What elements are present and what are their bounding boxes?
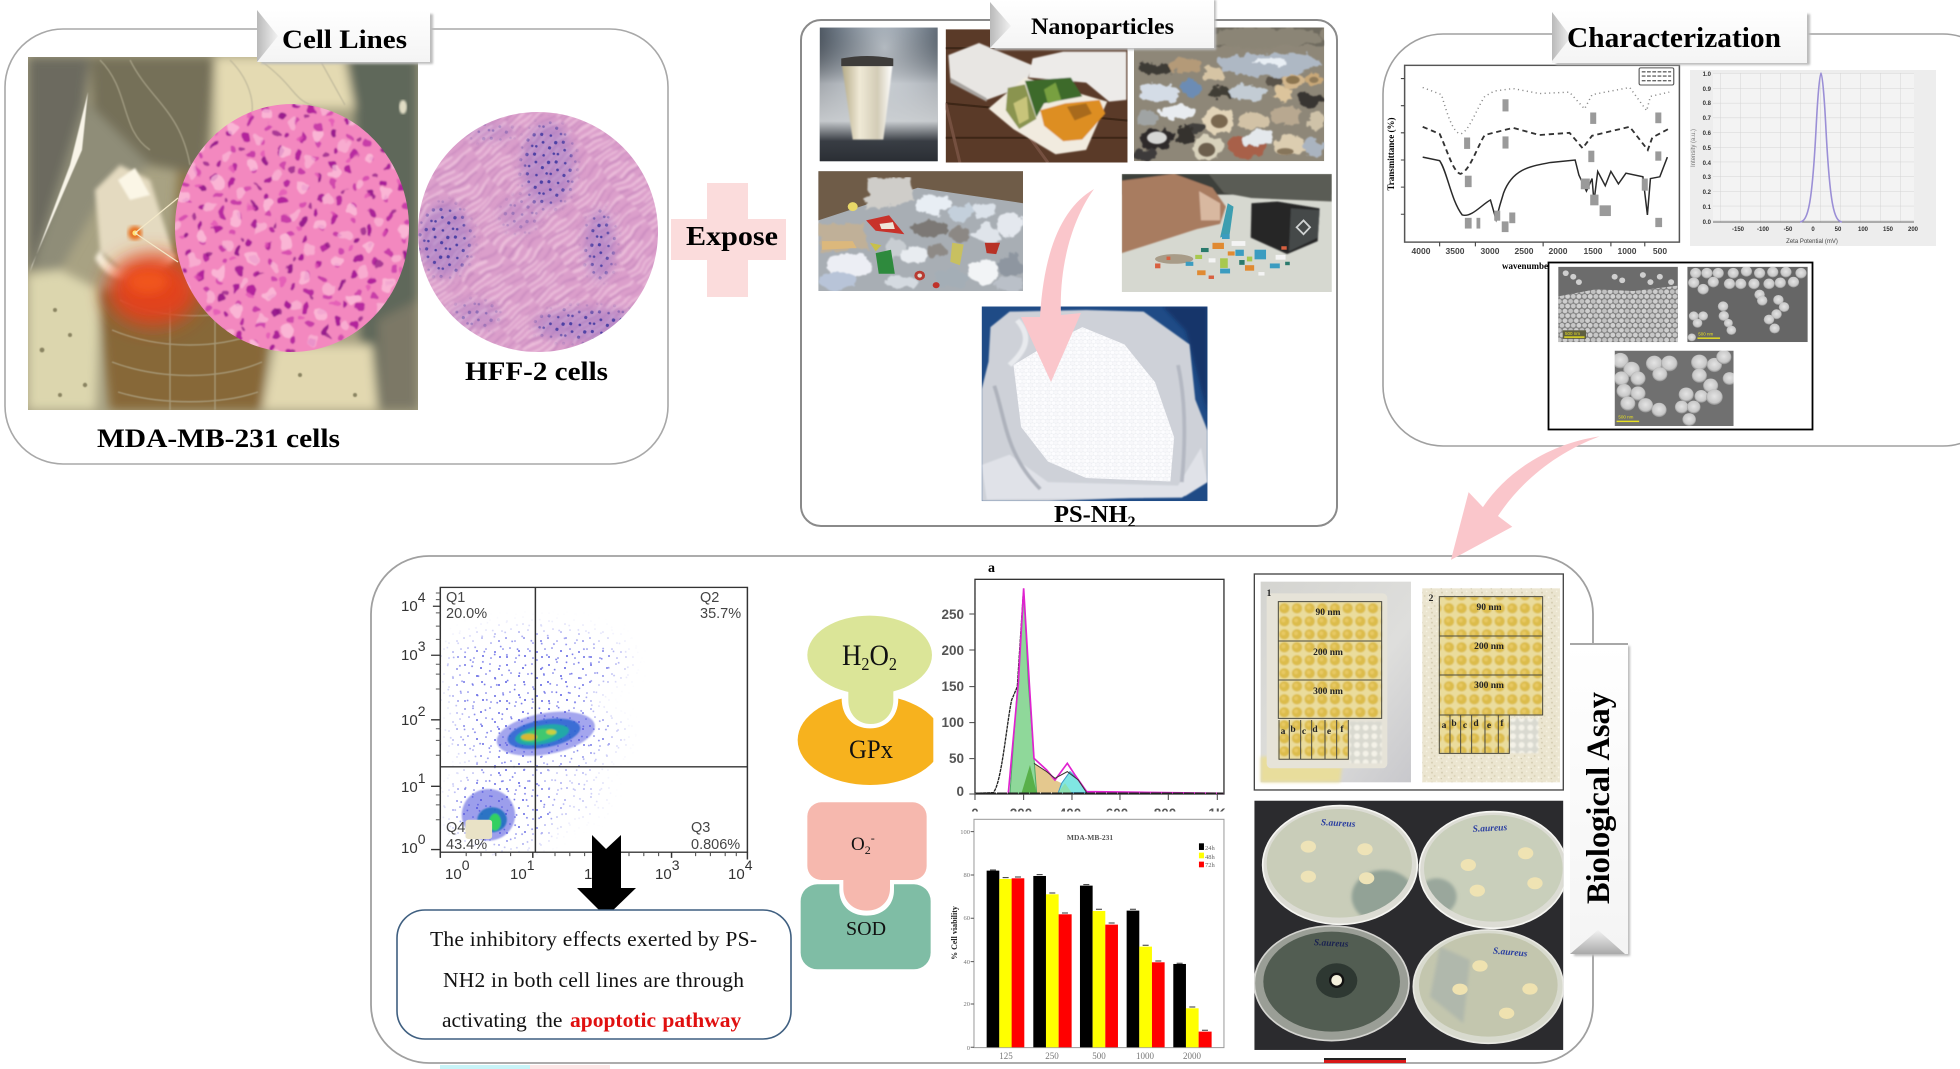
photo: trash bin xyxy=(818,171,1023,292)
image: MTT well plates: e xyxy=(1487,721,1491,731)
image: MDA-MB-231 histology circle xyxy=(170,100,415,358)
chart: flow cytometry scatter: 2 xyxy=(601,857,609,873)
image: SEM 300 nm xyxy=(1612,350,1736,426)
chart: FTIR spectra: 2000 xyxy=(1549,246,1568,256)
image: S. aureus agar plates xyxy=(1254,801,1567,1050)
chart: zeta potential: 1.0 xyxy=(1703,72,1712,78)
image: MTT well plates: 200 nm xyxy=(1474,642,1504,652)
chart: zeta potential: -100 xyxy=(1757,227,1770,233)
chart: zeta potential: 150 xyxy=(1883,227,1894,233)
chart: zeta potential: 0.2 xyxy=(1703,190,1712,196)
chart: flow cytometry scatter: 10 xyxy=(401,712,418,729)
image: SEM 90 nm: 500 nm xyxy=(1565,331,1580,336)
image: MTT well plates: f xyxy=(1500,719,1504,729)
chart: flow cytometry scatter: 1 xyxy=(418,770,426,786)
chart: cell viability bars: 0 xyxy=(967,1045,970,1052)
chart: cell viability bars: 24h xyxy=(1205,845,1216,852)
diagram: H2O2 and GPx: O xyxy=(870,639,889,672)
chart: cell cycle histogram: 600 xyxy=(1106,806,1128,821)
chart: FTIR spectra: 4000 xyxy=(1412,246,1431,256)
chart: FTIR spectra: wavenumber (cm-1) xyxy=(1502,261,1579,271)
chart: flow cytometry scatter: 10 xyxy=(655,866,672,883)
chart: zeta potential: 0.9 xyxy=(1703,87,1712,93)
chart: zeta potential: 50 xyxy=(1835,227,1842,233)
chart: flow cytometry scatter: 0 xyxy=(462,857,470,873)
petri dish 2 xyxy=(1417,812,1567,928)
chart: cell cycle histogram: 400 xyxy=(1059,806,1081,821)
petri dish 3 with inhibition zone xyxy=(1254,926,1409,1041)
box: SEM micrographs xyxy=(1548,262,1812,430)
image: MTT well plates: e xyxy=(1327,727,1331,737)
chart: flow cytometry scatter: 0.806% xyxy=(691,837,740,853)
chart: cell viability bars xyxy=(950,819,1224,1061)
chart: cell viability bars: 500 xyxy=(1092,1051,1106,1061)
image: MTT well plates: 1 xyxy=(1267,589,1272,599)
image: MTT well plates: a xyxy=(1281,727,1286,737)
chart: cell viability bars: 2000 xyxy=(1183,1051,1202,1061)
diagram: H2O2 and GPx: GPx xyxy=(849,735,893,764)
heading tag: characterization xyxy=(1552,10,1810,65)
chart: cell cycle histogram: 150 xyxy=(941,679,964,694)
chart: flow cytometry scatter: 3 xyxy=(418,638,426,654)
chart: zeta potential: -50 xyxy=(1784,227,1793,233)
chart: zeta potential xyxy=(1690,70,1936,246)
image: MTT well plates: 90 nm xyxy=(1476,603,1502,613)
image: MTT well plates xyxy=(1254,574,1563,790)
chart: FTIR spectra: 1000 xyxy=(1618,246,1637,256)
callout: apoptotic pathway conclusion: apoptotic pathway xyxy=(570,1008,741,1032)
chart: zeta potential: 200 xyxy=(1908,227,1919,233)
image: S. aureus agar plates: S.aureus xyxy=(1472,823,1508,835)
chart: cell cycle histogram: 0 xyxy=(971,806,979,821)
heading tag: nanoparticles xyxy=(990,0,1216,50)
image: SEM 200 nm: 500 nm xyxy=(1698,332,1714,337)
chart: cell viability bars: MDA-MB-231 xyxy=(1067,833,1113,842)
image: MTT well plates: 300 nm xyxy=(1313,687,1343,697)
chart: flow cytometry scatter: Q3 xyxy=(691,820,710,836)
chart: flow cytometry scatter: 43.4% xyxy=(446,837,487,853)
image: MTT well plates: 90 nm xyxy=(1315,608,1341,618)
chart: zeta potential: -150 xyxy=(1732,227,1745,233)
chart: FTIR spectra: 3500 xyxy=(1446,246,1465,256)
image: MTT well plates: c xyxy=(1302,727,1306,737)
chart: flow cytometry scatter: 10 xyxy=(728,866,745,883)
chart: cell viability bars: 125 xyxy=(999,1051,1013,1061)
chart: flow cytometry scatter: 2 xyxy=(418,703,426,719)
chart: FTIR spectra xyxy=(1386,65,1679,271)
image: MTT well plates: a xyxy=(1442,721,1447,731)
chart: cell viability bars: 80 xyxy=(964,872,970,879)
chart: cell viability bars: 40 xyxy=(964,959,970,966)
chart: zeta potential: 0 xyxy=(1811,227,1815,233)
heading tag: cell lines xyxy=(257,10,433,64)
scale bar remnant xyxy=(1324,1058,1406,1063)
chart: flow cytometry scatter: 3 xyxy=(672,857,680,873)
label: PS-NH2: PS-NH xyxy=(1054,501,1128,528)
chart: cell viability bars: 100 xyxy=(960,829,970,836)
heading tag: biological assay: Biological Asay xyxy=(1581,692,1617,904)
chart: FTIR spectra: 1500 xyxy=(1584,246,1603,256)
image: S. aureus agar plates: S.aureus xyxy=(1493,947,1528,960)
arrow: characterization to biological assay xyxy=(1451,436,1600,560)
decorative colour remnants under panel xyxy=(440,1065,610,1069)
chart: flow cytometry scatter: Q4 xyxy=(446,820,465,836)
label: MDA-MB-231 cells: MDA-MB-231 cells xyxy=(97,424,340,453)
image: MTT well plates: b xyxy=(1290,725,1296,735)
chart: zeta potential: Intensity (a.u.) xyxy=(1691,129,1697,167)
image: MTT well plates: d xyxy=(1312,725,1318,735)
chart: cell viability bars: % Cell viability xyxy=(950,906,959,960)
label: PS-NH2 xyxy=(1054,506,1135,526)
diagram: O2- and SOD: SOD xyxy=(846,918,886,940)
chart: cell cycle histogram: 100 xyxy=(941,715,964,730)
chart: cell viability bars: 72h xyxy=(1205,862,1216,869)
callout: apoptotic pathway conclusion: The inhibitory effects exerted by PS- xyxy=(430,927,757,951)
image: MTT well plates: b xyxy=(1451,719,1457,729)
heading tag: nanoparticles: Nanoparticles xyxy=(1031,14,1174,39)
panel: characterization xyxy=(1383,10,1960,446)
chart: cell cycle histogram: 1K xyxy=(1208,806,1226,821)
chart: flow cytometry scatter: 10 xyxy=(401,598,418,615)
chart: flow cytometry scatter: Q1 xyxy=(446,590,465,606)
chart: flow cytometry scatter: 10 xyxy=(401,840,418,857)
heading tag: cell lines: Cell Lines xyxy=(282,25,407,54)
chart: cell cycle histogram: 0 xyxy=(956,784,964,799)
image: SEM 200 nm xyxy=(1687,266,1808,342)
chart: flow cytometry scatter: 4 xyxy=(418,589,426,605)
diagram: H2O2 and GPx: 2 xyxy=(889,654,897,674)
chart: flow cytometry scatter: 20.0% xyxy=(446,606,487,622)
image: S. aureus agar plates: S.aureus xyxy=(1321,818,1356,830)
chart: cell cycle histogram: 50 xyxy=(949,751,964,766)
image: S. aureus agar plates: S.aureus xyxy=(1314,938,1349,950)
chart: FTIR spectra: 3000 xyxy=(1481,246,1500,256)
chart: zeta potential: 0.7 xyxy=(1703,116,1712,122)
plate 1 xyxy=(1261,582,1411,782)
image: MTT well plates: 200 nm xyxy=(1313,648,1343,658)
chart: flow cytometry scatter: 0 xyxy=(418,831,426,847)
callout: apoptotic pathway conclusion: activating the xyxy=(442,1008,562,1032)
image: MTT well plates: c xyxy=(1463,721,1467,731)
photo: white cup xyxy=(820,28,938,161)
chart: zeta potential: 0.8 xyxy=(1703,101,1712,107)
chart: cell cycle histogram: a xyxy=(988,561,995,576)
label: HFF-2 cells: HFF-2 cells xyxy=(465,357,608,386)
chart: zeta potential: 100 xyxy=(1858,227,1869,233)
chart: cell cycle histogram: 250 xyxy=(941,607,964,622)
chart: cell viability bars: 20 xyxy=(964,1001,970,1008)
chart: flow cytometry scatter: 10 xyxy=(445,866,462,883)
panel: biological assay xyxy=(371,556,1630,1069)
chart: flow cytometry scatter: 10 xyxy=(401,647,418,664)
chart: flow cytometry scatter: 1 xyxy=(527,857,535,873)
image: HFF-2 histology circle xyxy=(412,106,664,358)
diagram: O2- and SOD xyxy=(801,802,931,969)
chart: cell viability bars: 1000 xyxy=(1136,1051,1154,1061)
chart: cell cycle histogram: 200 xyxy=(941,643,964,658)
chart: flow cytometry scatter: 10 xyxy=(401,779,418,796)
panel: nanoparticles xyxy=(801,0,1337,531)
expose cross xyxy=(671,183,786,297)
diagram: H2O2 and GPx: H xyxy=(842,639,864,672)
panel outline: nanoparticles xyxy=(801,20,1337,526)
chart: FTIR spectra: 500 xyxy=(1653,246,1667,256)
chart: cell viability bars: 250 xyxy=(1045,1051,1059,1061)
chart: flow cytometry scatter xyxy=(401,587,753,883)
chart: flow cytometry scatter: 10 xyxy=(510,866,527,883)
chart: zeta potential: 0.1 xyxy=(1703,205,1712,211)
petri dish 4 xyxy=(1413,930,1563,1043)
chart: zeta potential: 0.5 xyxy=(1703,146,1712,152)
photo: breast tumour anatomy xyxy=(28,57,418,410)
photo: polystyrene beads bag xyxy=(982,307,1207,501)
image: SEM 300 nm: 500 nm xyxy=(1618,415,1634,419)
label: PS-NH2: 2 xyxy=(1128,514,1136,531)
image: MTT well plates: f xyxy=(1340,725,1344,735)
diagram: O2- and SOD: - xyxy=(871,831,875,845)
chart: zeta potential: 0.0 xyxy=(1703,220,1712,226)
chart: cell cycle histogram: 200 xyxy=(1010,806,1032,821)
chart: flow cytometry scatter: 4 xyxy=(745,857,753,873)
panel: cell lines xyxy=(5,10,668,464)
diagram: H2O2 and GPx: 2 xyxy=(861,654,870,674)
chart: flow cytometry scatter: 10 xyxy=(584,866,601,883)
chart: FTIR spectra: Transmittance (%) xyxy=(1386,117,1396,191)
chart: zeta potential: Zeta Potential (mV) xyxy=(1786,239,1838,245)
photo: hand with plastic pieces xyxy=(1122,174,1332,292)
photo: foam food tray xyxy=(946,29,1127,163)
chart: cell cycle histogram: 800 xyxy=(1154,806,1176,821)
callout: apoptotic pathway conclusion: NH2 in both cell lines are through xyxy=(443,968,744,992)
chart: FTIR spectra: 2500 xyxy=(1515,246,1534,256)
image: MTT well plates: d xyxy=(1473,719,1479,729)
chart: cell viability bars: 48h xyxy=(1205,854,1216,861)
heading tag: biological assay xyxy=(1570,644,1630,956)
arrow: to PS-NH2 xyxy=(1021,189,1094,382)
chart: cell viability bars: 60 xyxy=(964,915,970,922)
petri dish 1 xyxy=(1263,806,1417,924)
plate 2 xyxy=(1422,588,1560,782)
chart: zeta potential: 0.6 xyxy=(1703,131,1712,137)
chart: flow cytometry scatter: 35.7% xyxy=(700,606,741,622)
photo: waste cups pile xyxy=(1134,21,1325,162)
heading tag: characterization: Characterization xyxy=(1567,23,1781,54)
expose cross: Expose xyxy=(686,221,778,251)
chart: zeta potential: 0.3 xyxy=(1703,175,1712,181)
chart: flow cytometry scatter: Q2 xyxy=(700,590,719,606)
chart: zeta potential: 0.4 xyxy=(1703,161,1712,167)
diagram: H2O2 and GPx xyxy=(798,616,942,785)
diagram: O2- and SOD: 2 xyxy=(865,843,871,857)
panel outline: characterization xyxy=(1383,34,1960,446)
image: MTT well plates: 300 nm xyxy=(1474,681,1504,691)
callout: apoptotic pathway conclusion xyxy=(397,910,791,1039)
diagram: O2- and SOD: O xyxy=(851,834,865,855)
chart: cell cycle histogram xyxy=(941,561,1230,822)
image: SEM 90 nm xyxy=(1558,267,1678,342)
image: MTT well plates: 2 xyxy=(1429,594,1434,604)
panel outline: cell lines xyxy=(5,29,668,464)
arrow: flow result to conclusion xyxy=(577,835,636,917)
panel outline: biological assay xyxy=(371,556,1593,1063)
